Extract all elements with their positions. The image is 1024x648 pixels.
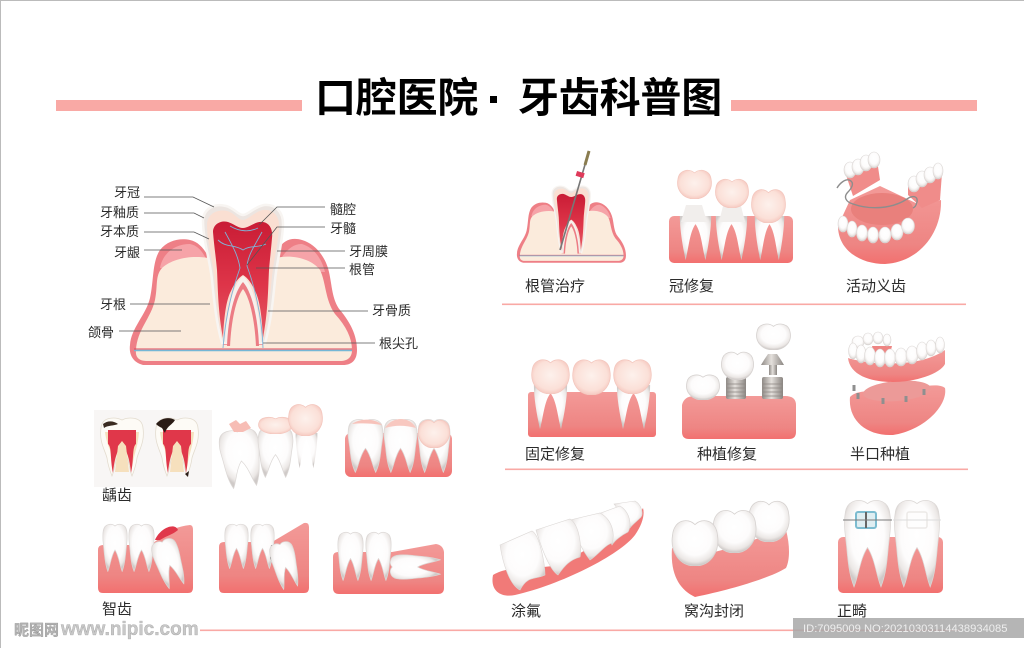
panel: orthodontics <box>838 500 943 593</box>
upper teeth <box>848 332 944 367</box>
panel: gum with three teeth <box>345 419 452 477</box>
upper right gum piece <box>908 173 942 208</box>
label: pit and fissure sealant: 窝沟封闭 <box>684 602 744 620</box>
title <box>315 75 722 121</box>
panel: wisdom tooth C <box>333 532 444 594</box>
anatomy labels: 根管 <box>349 262 375 277</box>
anatomy labels: 牙骨质 <box>372 303 411 318</box>
label: fluoride: 涂氟 <box>511 603 541 620</box>
title: 口腔医院 <box>315 75 478 121</box>
watermark right: ID:7095009 NO:20210303114438934085 <box>803 623 1007 635</box>
caries tooth left <box>101 418 143 476</box>
label: orthodontics: 正畸 <box>837 603 867 620</box>
upper arch gum <box>848 350 945 382</box>
label: crown restoration: 冠修复 <box>669 277 714 295</box>
watermark right <box>793 618 1024 638</box>
panel: wisdom tooth B <box>219 523 309 593</box>
implants <box>854 385 924 404</box>
panel: removable denture <box>837 152 943 264</box>
denture wire <box>837 180 917 208</box>
anatomy labels: 根尖孔 <box>379 336 418 351</box>
anatomy labels: 牙釉质 <box>100 205 139 220</box>
title bar right <box>731 100 977 111</box>
anatomy labels <box>88 185 418 351</box>
panel: pit and fissure sealant <box>672 501 789 597</box>
endodontic file <box>560 151 589 250</box>
anatomy labels: 髓腔 <box>330 202 356 217</box>
label: fixed bridge: 固定修复 <box>525 445 585 463</box>
root canal veins <box>218 226 266 348</box>
panel: fixed bridge <box>528 360 656 437</box>
title: 牙齿科普图 <box>518 75 722 121</box>
caries tooth right <box>156 418 198 477</box>
upper teeth <box>844 152 943 192</box>
bracket <box>856 512 876 528</box>
anatomy labels: 牙根 <box>100 297 126 312</box>
divider row 2 <box>505 468 968 470</box>
lower gum <box>838 186 941 264</box>
label: full-arch implant: 半口种植 <box>850 446 910 463</box>
implant two <box>761 354 784 399</box>
title bar left <box>56 100 302 111</box>
panel: crown restoration <box>669 170 793 263</box>
panel: wisdom tooth A <box>98 524 193 593</box>
panel: caries <box>94 410 212 487</box>
panel: tooth anatomy diagram <box>88 185 418 365</box>
divider bottom <box>200 630 960 631</box>
front teeth <box>838 216 914 243</box>
label: root canal treatment: 根管治疗 <box>525 278 585 295</box>
panel: fluoride <box>492 501 644 596</box>
anatomy labels: 牙冠 <box>114 185 140 200</box>
divider row 1 <box>502 304 966 305</box>
panel: implant restoration <box>682 324 796 439</box>
anatomy labels: 牙周膜 <box>349 244 388 259</box>
panel: restorations on teeth <box>217 405 322 490</box>
anatomy labels: 牙龈 <box>114 245 140 260</box>
panel: root canal treatment <box>517 151 626 263</box>
label: implant restoration: 种植修复 <box>697 445 757 463</box>
leader lines <box>119 197 375 343</box>
panel: full-arch implant <box>848 332 945 435</box>
label: wisdom tooth: 智齿 <box>102 600 132 618</box>
upper left gum piece <box>845 160 880 196</box>
anatomy labels: 牙髓 <box>330 221 356 236</box>
label: removable denture: 活动义齿 <box>846 278 906 295</box>
anatomy labels: 颌骨 <box>88 325 114 340</box>
watermark left: 昵图网 <box>14 622 59 639</box>
label: caries: 龋齿 <box>102 487 132 504</box>
implant one <box>726 377 746 399</box>
anatomy labels: 牙本质 <box>100 224 139 239</box>
watermark left: www.nipic.com <box>60 619 199 640</box>
lower arch <box>850 385 945 435</box>
